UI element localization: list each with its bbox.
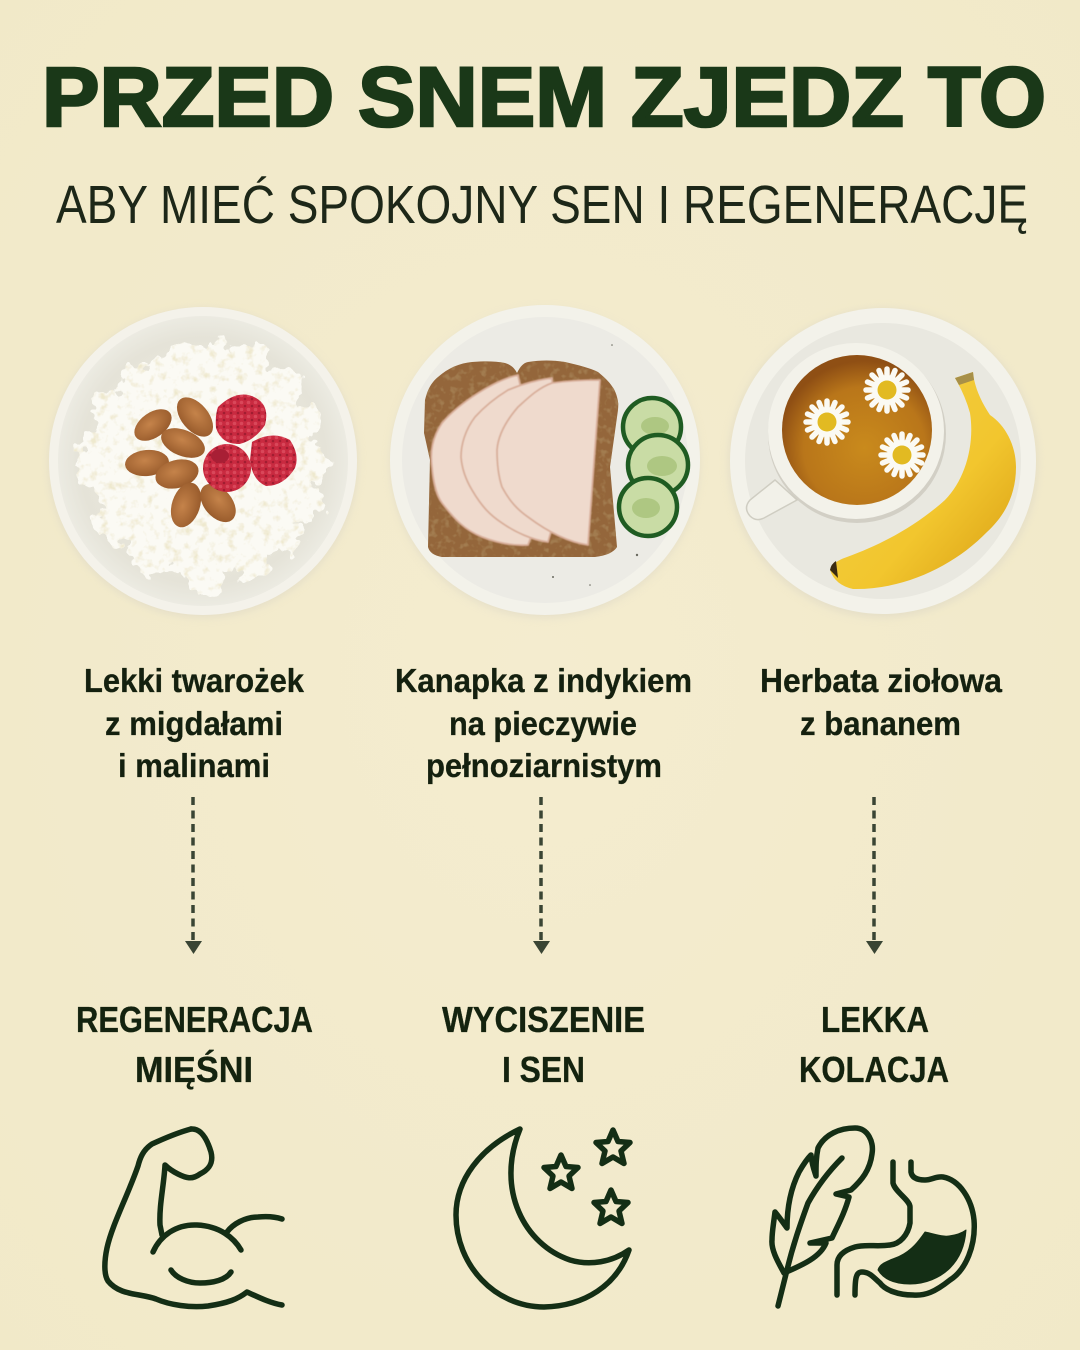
caption: cottage cheese	[84, 662, 305, 784]
arrow 2	[533, 797, 550, 954]
food photo: cottage cheese bowl	[48, 307, 358, 618]
icon: feather and stomach	[772, 1128, 974, 1306]
turkey slices	[431, 375, 600, 545]
outcome: calm and sleep: WYCISZENIE	[442, 999, 645, 1040]
food photo: herbal tea and banana	[728, 308, 1038, 618]
outcome: muscle regeneration: MIĘŚNI	[135, 1048, 253, 1090]
bread	[424, 360, 618, 557]
arrow 3	[866, 797, 883, 954]
outcome: light dinner: LEKKA	[821, 999, 929, 1040]
caption: cottage cheese: Lekki twarożek	[84, 662, 305, 699]
caption: cottage cheese: z migdałami	[105, 705, 283, 742]
outcome: calm and sleep	[442, 999, 645, 1090]
food photo: turkey sandwich plate	[390, 305, 700, 618]
outcome: light dinner: KOLACJA	[799, 1049, 949, 1090]
banana	[830, 372, 1016, 589]
icon: moon and stars	[456, 1129, 630, 1307]
cup	[768, 345, 946, 523]
stomach	[837, 1162, 910, 1295]
cup handle	[746, 480, 797, 520]
outcome: muscle regeneration	[76, 999, 313, 1090]
outcome: calm and sleep: I SEN	[502, 1049, 585, 1090]
raspberries	[203, 395, 297, 492]
caption: turkey sandwich: Kanapka z indykiem	[395, 662, 692, 699]
title: PRZED SNEM ZJEDZ TO	[42, 50, 1046, 144]
outcome: muscle regeneration: REGENERACJA	[76, 999, 313, 1040]
arrow 1	[185, 797, 202, 954]
caption: turkey sandwich	[395, 662, 692, 784]
caption: herbal tea: z bananem	[800, 705, 961, 742]
icon: flexed arm	[105, 1129, 282, 1307]
daisies	[806, 369, 923, 476]
cottage cheese	[75, 341, 332, 595]
caption: turkey sandwich: pełnoziarnistym	[426, 747, 662, 784]
caption: cottage cheese: i malinami	[118, 747, 270, 784]
plate specks	[552, 344, 638, 586]
stars	[544, 1130, 630, 1224]
tea	[782, 355, 932, 505]
almonds	[124, 391, 243, 531]
caption: herbal tea	[760, 662, 1003, 742]
caption: herbal tea: Herbata ziołowa	[760, 662, 1003, 699]
caption: turkey sandwich: na pieczywie	[449, 705, 637, 742]
feather	[772, 1128, 872, 1273]
cucumbers	[619, 398, 688, 536]
outcome: light dinner	[799, 999, 949, 1090]
